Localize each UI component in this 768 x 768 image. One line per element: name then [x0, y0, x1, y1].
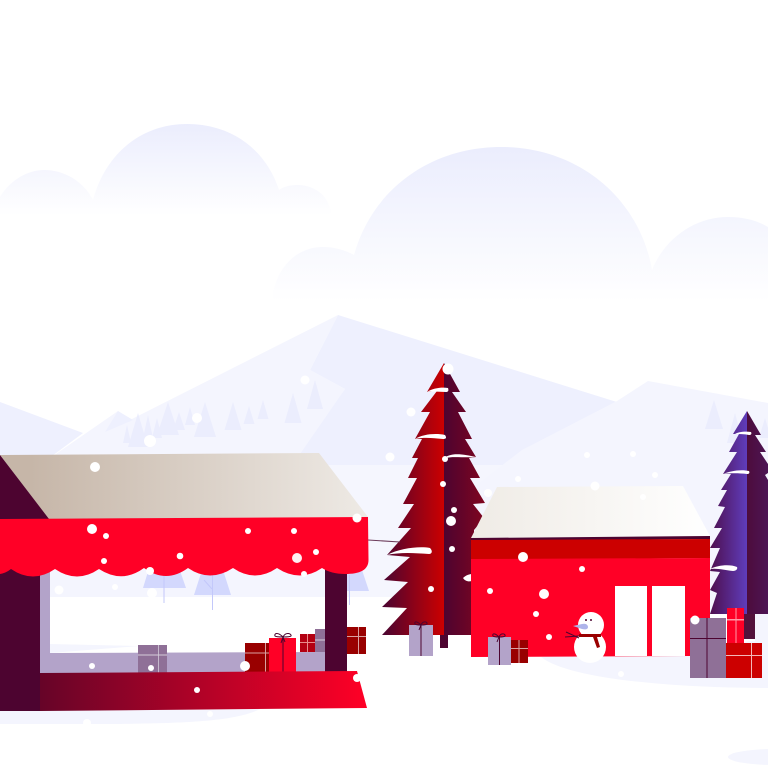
right post [325, 565, 347, 673]
pine seen through window: right [347, 570, 369, 605]
mask and nose [573, 624, 588, 629]
cloud: right [272, 147, 768, 302]
mountain: right [470, 381, 768, 660]
mountain: small peak [40, 411, 134, 470]
string lights wire [368, 540, 400, 542]
eaves strip [471, 536, 710, 541]
wall [471, 558, 710, 657]
gift stack: right [690, 608, 762, 678]
distant pine trees [123, 380, 768, 447]
market stall [0, 453, 369, 711]
purple pine tree [710, 411, 768, 639]
gable end [0, 455, 49, 519]
gift: mauve on counter [138, 645, 167, 673]
window lower area [50, 597, 330, 653]
cloud: left [0, 124, 331, 216]
trunk [744, 610, 755, 639]
gift: lavender by tree [409, 622, 433, 656]
door: right [652, 586, 685, 656]
snow drift: under shop [0, 705, 262, 724]
head [578, 612, 604, 638]
snowflakes [54, 364, 700, 727]
mountain: small shaded face [105, 411, 133, 432]
gift: small red [300, 634, 315, 652]
gift: far right behind post [347, 627, 366, 654]
gift: dark red on counter [245, 643, 274, 672]
mountains [0, 315, 768, 660]
red pine tree [382, 363, 485, 648]
window background [40, 570, 330, 597]
large mauve gift [690, 618, 726, 678]
snow drift: right of house [541, 640, 768, 688]
eyes [585, 619, 587, 621]
left half of foliage [382, 363, 445, 635]
window sill haze [50, 644, 140, 653]
trunk [440, 630, 448, 648]
roof [471, 486, 710, 538]
scarf [579, 634, 601, 648]
gift: bright red with bow [269, 633, 296, 672]
door: left [615, 586, 647, 656]
pine seen through window: centre [194, 570, 231, 610]
snow drift: bottom right [728, 749, 768, 765]
dark red gift [726, 643, 762, 678]
gift: dark red by house [511, 640, 528, 663]
gift: lavender by house [488, 634, 511, 665]
right half of foliage [747, 411, 768, 614]
right half of foliage [444, 363, 485, 635]
mountain: centre shaded face [285, 315, 620, 470]
ground patches [0, 640, 768, 765]
body [574, 631, 606, 663]
snow on branches [387, 388, 476, 581]
left half of foliage [710, 411, 748, 614]
roof [0, 453, 368, 519]
scalloped awning [0, 517, 368, 576]
house [471, 486, 710, 657]
window frame [40, 570, 325, 673]
counter [40, 671, 367, 711]
gift: small mauve [315, 629, 325, 652]
fascia band [471, 539, 710, 560]
pine seen through window: left [143, 565, 186, 603]
snow on branches [710, 432, 751, 571]
mountain: centre lit face [60, 315, 345, 470]
mountain: far left [0, 402, 83, 465]
snowman [565, 612, 606, 663]
red gift on top [727, 608, 744, 643]
left post [0, 519, 40, 711]
valley haze band [0, 465, 520, 597]
arm [565, 632, 579, 638]
